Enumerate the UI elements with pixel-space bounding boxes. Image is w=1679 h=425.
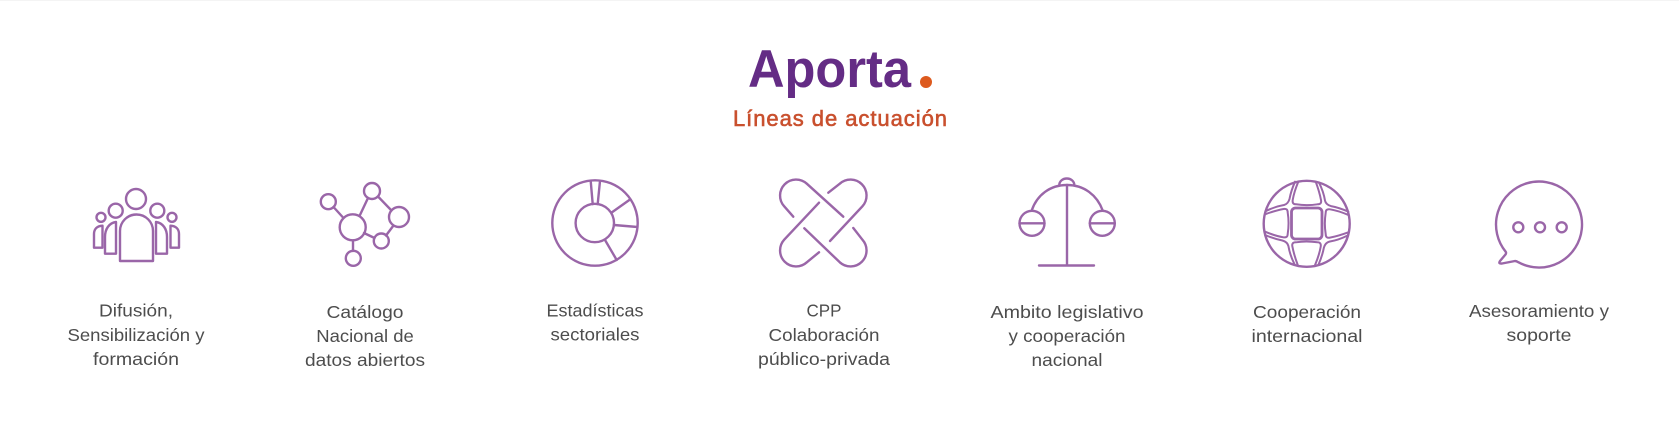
label: nacional <box>1032 350 1102 370</box>
label <box>305 302 425 370</box>
label <box>1469 301 1609 345</box>
panel: catálogo <box>305 183 425 370</box>
label <box>68 301 205 369</box>
label: Catálogo <box>326 302 404 322</box>
label <box>546 301 644 345</box>
label: Ambito legislativo <box>990 302 1144 322</box>
panel: ámbito legislativo <box>990 179 1144 370</box>
subtitle: Líneas de actuación <box>733 106 947 131</box>
title dot <box>920 76 932 88</box>
label: Nacional de <box>316 326 414 346</box>
label: sectoriales <box>550 325 640 345</box>
label: y cooperación <box>1008 326 1126 346</box>
icon: people group <box>94 189 179 261</box>
icon: donut chart <box>552 180 638 266</box>
label <box>990 302 1144 370</box>
header <box>733 40 947 131</box>
icon: speech bubble <box>1496 182 1582 268</box>
title: Aporta <box>748 40 911 99</box>
panel: estadísticas <box>546 180 644 345</box>
panel: asesoramiento <box>1469 182 1609 345</box>
label: internacional <box>1252 326 1362 346</box>
label: datos abiertos <box>305 350 425 370</box>
label: Difusión, <box>99 301 173 321</box>
icon: network nodes <box>321 183 409 266</box>
icon: globe <box>1264 181 1350 267</box>
label <box>1252 302 1362 346</box>
label: formación <box>93 349 179 369</box>
panel: cooperación internacional <box>1252 181 1362 346</box>
label: Asesoramiento y <box>1469 301 1609 321</box>
label: público-privada <box>758 349 890 369</box>
panel: difusión <box>68 189 205 369</box>
icon: interlaced bands <box>780 180 867 266</box>
icon: scales <box>1020 179 1115 266</box>
label: CPP <box>806 301 842 321</box>
label: Cooperación <box>1253 302 1361 322</box>
label: Estadísticas <box>546 301 644 321</box>
label <box>758 301 890 369</box>
label: Sensibilización y <box>68 325 205 345</box>
label: Colaboración <box>768 325 880 345</box>
label: soporte <box>1506 325 1572 345</box>
panel: CPP <box>758 180 890 369</box>
